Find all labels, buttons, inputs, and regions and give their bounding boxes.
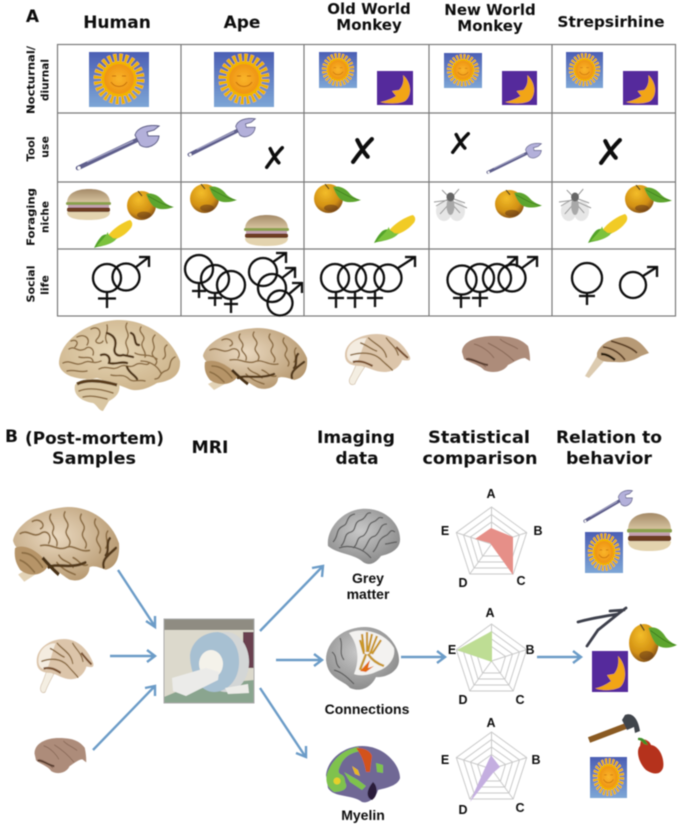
panel A: comparison table bbox=[24, 0, 676, 411]
radar chart: myelin: D bbox=[458, 803, 468, 817]
row labels: Social bbox=[24, 266, 38, 302]
pipeline column headings: MRI bbox=[192, 438, 228, 458]
row: foraging niche icons bbox=[66, 184, 672, 248]
radar chart: myelin: A bbox=[486, 716, 496, 730]
connections brain bbox=[325, 627, 410, 717]
row: tool use icons bbox=[77, 118, 620, 173]
radar chart: grey matter: B bbox=[533, 524, 543, 538]
pipeline column headings: comparison bbox=[422, 449, 538, 469]
column headers: New World bbox=[444, 1, 536, 19]
behavior group: wrench, burger, sun bbox=[584, 490, 672, 573]
row labels: niche bbox=[40, 201, 52, 233]
radar chart: grey matter: A bbox=[486, 487, 496, 501]
radar chart: grey matter: E bbox=[441, 524, 449, 538]
arrows into scanner bbox=[93, 570, 155, 750]
row labels bbox=[24, 46, 52, 302]
radar chart: myelin bbox=[441, 716, 541, 817]
behavior group: pliers, orange, moon bbox=[578, 608, 677, 692]
radar chart: connections bbox=[448, 606, 535, 707]
pipeline column headings bbox=[5, 427, 662, 469]
pipeline column headings: Imaging bbox=[317, 428, 395, 448]
row labels: use bbox=[38, 136, 52, 158]
pipeline column headings: Statistical bbox=[428, 428, 530, 448]
column headers: Ape bbox=[224, 13, 260, 33]
radar chart: grey matter: C bbox=[516, 574, 526, 588]
row: nocturnal or diurnal icons bbox=[89, 52, 658, 107]
panel letter A: A bbox=[26, 7, 40, 27]
radar chart: grey matter: D bbox=[458, 576, 468, 590]
grey matter brain: Grey bbox=[352, 570, 384, 586]
arrows to and from radar charts bbox=[401, 651, 581, 663]
table grid bbox=[57, 44, 676, 316]
row labels: Nocturnal/ bbox=[26, 46, 38, 114]
grey matter brain bbox=[328, 509, 400, 602]
radar chart: connections: E bbox=[448, 643, 456, 657]
radar chart: connections: A bbox=[485, 606, 495, 620]
row labels: Foraging bbox=[26, 188, 38, 246]
pipeline column headings: data bbox=[336, 449, 378, 469]
panel B: imaging pipeline bbox=[5, 427, 677, 823]
column headers: Old World bbox=[327, 0, 411, 18]
sample brains bbox=[13, 507, 119, 773]
row of species brains bbox=[59, 320, 649, 411]
pipeline column headings: behavior bbox=[566, 449, 653, 469]
column headers: Monkey bbox=[457, 17, 523, 35]
radar chart: myelin: E bbox=[441, 753, 449, 767]
pipeline column headings: Relation to bbox=[556, 428, 662, 448]
pipeline column headings: (Post-mortem) bbox=[25, 429, 164, 449]
radar chart: myelin: B bbox=[531, 753, 541, 767]
radar chart: connections: C bbox=[515, 693, 525, 707]
row: social life symbols bbox=[93, 253, 657, 316]
column headers: Monkey bbox=[336, 16, 402, 34]
connections brain: Connections bbox=[325, 701, 410, 717]
behavior group: hammer, pepper, sun bbox=[589, 714, 663, 798]
row labels: Tool bbox=[24, 137, 38, 161]
grey matter brain: matter bbox=[347, 586, 390, 602]
row labels: life bbox=[38, 275, 52, 295]
MRI scanner photo bbox=[164, 619, 254, 703]
column headers: Human bbox=[83, 13, 151, 33]
arrows out of scanner bbox=[260, 566, 323, 757]
radar chart: connections: B bbox=[525, 643, 535, 657]
pipeline column headings: Samples bbox=[52, 449, 136, 469]
column headers bbox=[83, 0, 665, 35]
radar chart: grey matter bbox=[441, 487, 543, 590]
row labels: diurnal bbox=[40, 59, 52, 101]
column headers: Strepsirhine bbox=[557, 13, 665, 31]
radar chart: connections: D bbox=[458, 693, 468, 707]
myelin brain bbox=[326, 746, 400, 823]
myelin brain: Myelin bbox=[341, 807, 385, 823]
radar chart: myelin: C bbox=[515, 801, 525, 815]
pipeline column headings: B bbox=[5, 427, 18, 447]
